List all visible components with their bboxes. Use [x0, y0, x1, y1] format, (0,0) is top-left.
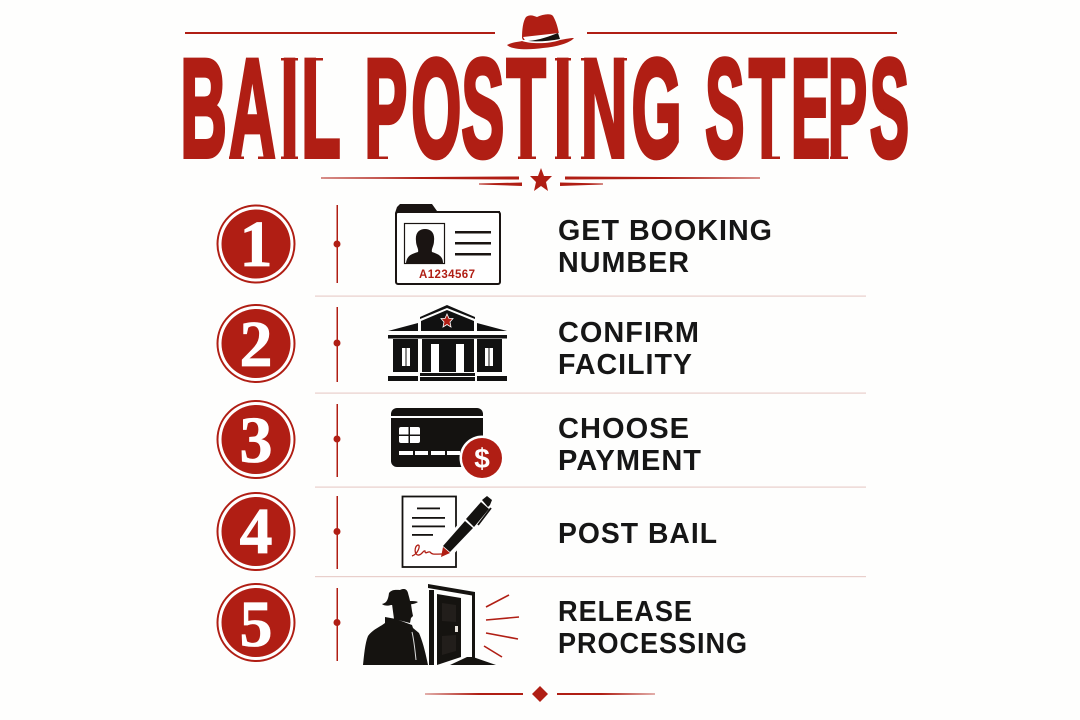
- step 1: [218, 204, 773, 284]
- number badge 4: [218, 493, 294, 570]
- timeline marker 1: [334, 205, 340, 283]
- step 4: [218, 493, 718, 570]
- step label 5: RELEASE: [558, 596, 693, 628]
- number badge 4: 4: [240, 495, 272, 568]
- icon: booking record folder: [395, 204, 500, 284]
- number badge 1: 1: [240, 208, 272, 281]
- icon: courthouse facility: [388, 305, 507, 381]
- step 2: [218, 305, 700, 382]
- number badge 1: [218, 206, 294, 282]
- step label 1: [558, 215, 773, 279]
- step label 3: PAYMENT: [558, 445, 702, 477]
- icon: fedora hat: [507, 14, 574, 49]
- icon: signed document and pen: [402, 496, 495, 567]
- step label 1: GET BOOKING: [558, 215, 773, 247]
- icon: booking record folder: A1234567: [419, 269, 475, 281]
- timeline marker 5: [334, 588, 340, 661]
- icon: credit card with dollar coin: [391, 408, 504, 480]
- timeline marker 3: [334, 404, 340, 477]
- footer ornament with diamond: [425, 686, 655, 702]
- title: [180, 30, 909, 187]
- step label 1: NUMBER: [558, 247, 690, 279]
- icon: figure leaving through door: [363, 584, 519, 665]
- step label 3: CHOOSE: [558, 413, 690, 445]
- step label 2: FACILITY: [558, 349, 693, 381]
- header rule with hat: [185, 14, 897, 49]
- number badge 2: 2: [240, 308, 272, 381]
- step label 4: POST BAIL: [558, 518, 718, 550]
- step 5: [218, 584, 748, 665]
- step label 5: [558, 596, 748, 660]
- number badge 2: [218, 305, 294, 382]
- number badge 3: 3: [240, 404, 272, 477]
- step label 2: CONFIRM: [558, 317, 700, 349]
- step label 2: [558, 317, 700, 381]
- icon: credit card with dollar coin: $: [474, 443, 490, 474]
- title: STEPS: [705, 30, 909, 186]
- step label 3: [558, 413, 702, 477]
- number badge 3: [218, 401, 294, 478]
- title: POSTING: [364, 31, 682, 187]
- step 3: [218, 401, 702, 480]
- title: BAIL: [180, 31, 341, 187]
- number badge 5: 5: [240, 588, 272, 661]
- timeline marker 2: [334, 307, 340, 382]
- title ornament with star: [321, 168, 760, 191]
- number badge 5: [218, 584, 294, 661]
- step label 5: PROCESSING: [558, 628, 748, 660]
- timeline marker 4: [334, 496, 340, 569]
